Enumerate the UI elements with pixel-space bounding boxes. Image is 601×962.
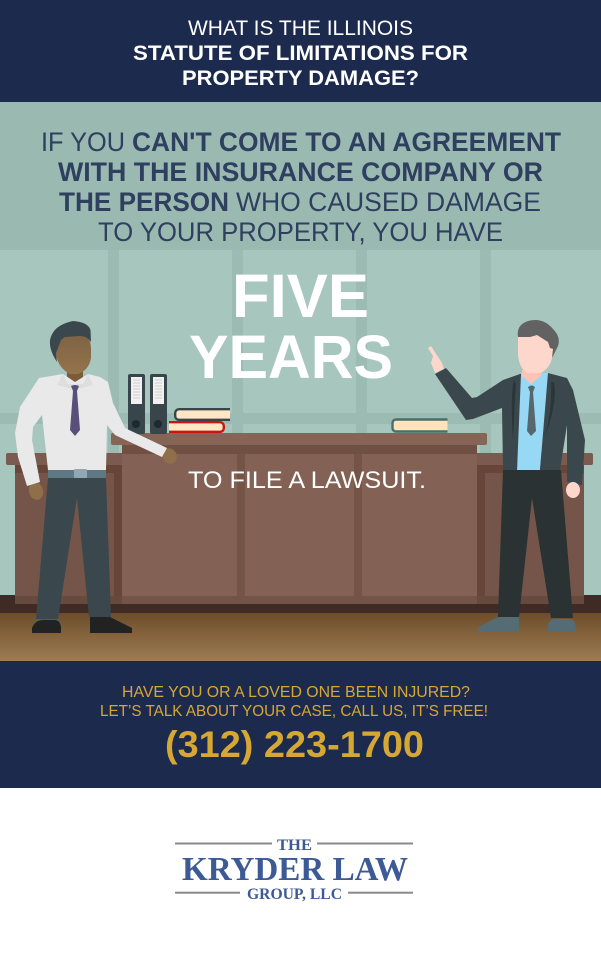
hand	[566, 482, 580, 498]
call to action text	[100, 684, 488, 720]
to file a lawsuit text: TO FILE A LAWSUIT.	[188, 467, 426, 494]
intro text: TO YOUR PROPERTY, YOU HAVE	[98, 217, 503, 247]
right hand	[159, 446, 180, 466]
right cabinet	[470, 453, 593, 604]
baseboard	[0, 595, 601, 614]
phone number: (312) 223-1700	[165, 724, 424, 765]
right shoe	[90, 617, 132, 633]
intro text	[41, 127, 561, 247]
right shoe	[548, 619, 576, 632]
header title: STATUTE OF LIMITATIONS FOR	[133, 42, 468, 65]
left hand	[27, 480, 45, 502]
floor	[0, 613, 601, 661]
shirt	[15, 374, 167, 486]
jacket	[435, 368, 585, 485]
header title: WHAT IS THE ILLINOIS	[188, 17, 413, 40]
trousers	[36, 478, 111, 619]
tie	[527, 386, 536, 436]
call to action banner	[0, 661, 601, 788]
head	[518, 335, 553, 373]
central desk	[111, 433, 487, 604]
pointing hand	[428, 346, 444, 373]
intro text: IF YOU	[41, 127, 125, 157]
neck	[522, 370, 541, 384]
belt	[48, 470, 106, 479]
man right	[428, 320, 585, 632]
logo: THE	[277, 837, 312, 854]
intro text: WITH THE INSURANCE COMPANY OR	[58, 157, 543, 187]
hair	[518, 320, 559, 358]
header title: PROPERTY DAMAGE?	[182, 67, 419, 90]
head	[56, 336, 91, 374]
five years headline	[189, 262, 393, 391]
five years headline: FIVE	[232, 262, 369, 330]
binders	[128, 374, 167, 434]
jacket lapels	[512, 380, 555, 440]
left shoe	[477, 617, 519, 632]
neck	[67, 370, 83, 384]
shirt	[517, 373, 548, 470]
tie	[70, 385, 80, 436]
header title	[133, 17, 468, 90]
trousers	[498, 470, 573, 618]
call to action text: LET’S TALK ABOUT YOUR CASE, CALL US, IT’S FREE!	[100, 703, 488, 720]
header banner	[0, 0, 601, 102]
single book	[392, 420, 448, 432]
logo	[175, 837, 413, 903]
left shoe	[32, 620, 61, 633]
hair	[50, 321, 91, 362]
left cabinet	[6, 453, 124, 604]
five years headline: YEARS	[189, 323, 393, 391]
collar	[57, 374, 93, 389]
intro text: WHO CAUSED DAMAGE	[236, 187, 541, 217]
logo: GROUP, LLC	[247, 886, 342, 903]
man left	[15, 321, 180, 633]
office scene illustration	[0, 102, 601, 661]
intro text: CAN'T COME TO AN AGREEMENT	[132, 127, 561, 157]
belt buckle	[74, 469, 87, 480]
intro panel	[0, 102, 601, 250]
window wall	[0, 102, 601, 614]
intro text: THE PERSON	[59, 187, 229, 217]
book stack	[169, 409, 230, 432]
call to action text: HAVE YOU OR A LOVED ONE BEEN INJURED?	[122, 684, 470, 701]
logo: KRYDER LAW	[182, 851, 408, 888]
